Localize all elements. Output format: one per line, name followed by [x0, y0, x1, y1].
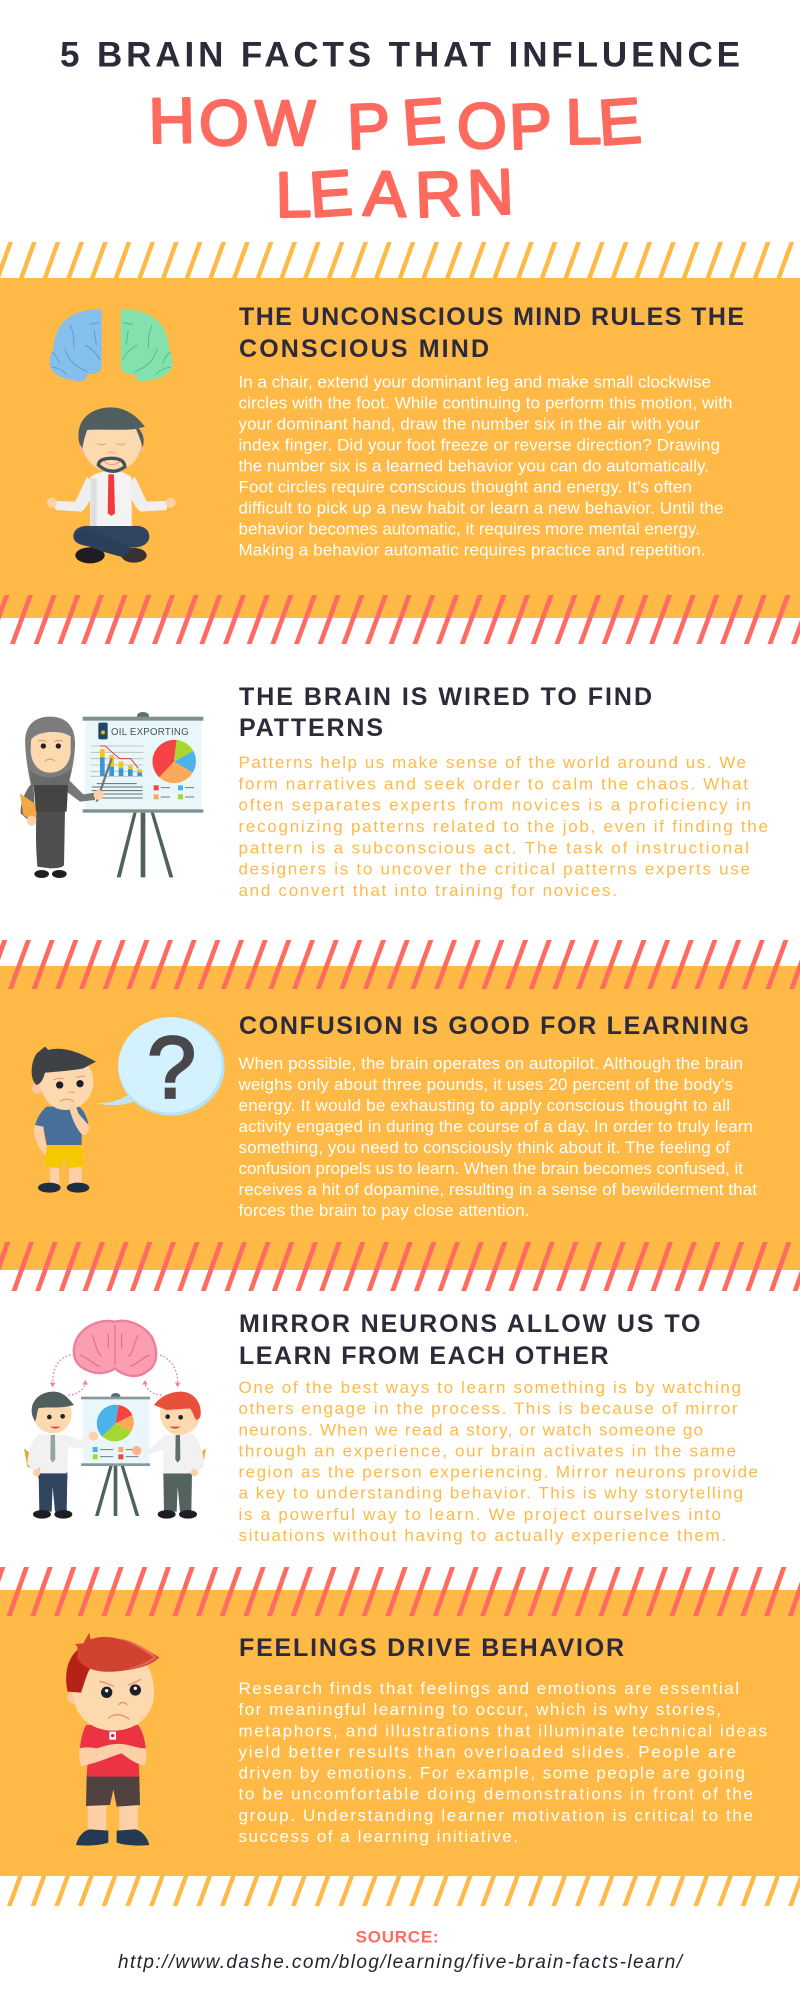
- heading: CONSCIOUS MIND: [239, 335, 489, 363]
- body text: activity engaged in during the course of a day. In order to truly learn: [238, 1117, 753, 1136]
- heading: [239, 683, 652, 742]
- body text: difficult to pick up a new habit or learn a new behavior. Until the: [238, 498, 724, 517]
- body text: [238, 1054, 757, 1220]
- icon: brain halves and meditating man: [47, 309, 176, 563]
- body text: and convert that into training for novices.: [238, 881, 617, 900]
- body text: metaphors, and illustrations that illuminate technical ideas: [238, 1721, 767, 1740]
- body text: yield better results than overloaded slides. People are: [238, 1742, 736, 1761]
- icon: two presenters and brain: [24, 1321, 206, 1519]
- right presenter: [132, 1392, 206, 1519]
- panel: unconscious mind: [0, 278, 800, 618]
- body text: One of the best ways to learn something is by watching: [238, 1378, 741, 1397]
- body text: Foot circles require conscious thought and energy. It's often: [238, 477, 692, 496]
- body text: situations without having to actually experience them.: [238, 1526, 726, 1545]
- body text: receives a hit of dopamine, resulting in a sense of bewilderment that: [238, 1180, 757, 1199]
- body text: group. Understanding learner motivation is critical to the: [238, 1806, 753, 1825]
- title line: subtitle: 5 BRAIN FACTS THAT INFLUENCE: [60, 36, 740, 74]
- body text: driven by emotions. For example, some people are going: [238, 1764, 745, 1783]
- body text: circles with the foot. While continuing to perform this motion, with: [238, 393, 732, 412]
- title line: learn: LEARN: [275, 155, 515, 231]
- body text: is a powerful way to learn. We project ourselves into: [238, 1505, 721, 1524]
- body text: pattern is a subconscious act. The task of instructional: [238, 838, 749, 857]
- title line: how people: HOW PEOPLE: [148, 84, 644, 163]
- body text: through an experience, our brain activates in the same: [238, 1441, 736, 1460]
- body text: to be uncomfortable doing demonstrations in front of the: [238, 1785, 753, 1804]
- icon: presenter with oil exporting chart: OIL EXPORTING: [111, 727, 189, 738]
- heading: [239, 303, 744, 363]
- icon: thinking boy with question bubble: [32, 1017, 225, 1193]
- body text: confusion propels us to learn. When the brain becomes confused, it: [238, 1159, 743, 1178]
- body text: weighs only about three pounds, it uses 20 percent of the body's: [238, 1075, 733, 1094]
- icon: angry boy: [66, 1633, 159, 1846]
- body text: Patterns help us make sense of the world around us. We: [238, 753, 746, 772]
- body text: designers is to uncover the critical patterns experts use: [238, 860, 750, 879]
- body text: In a chair, extend your dominant leg and make small clockwise: [238, 372, 711, 391]
- body text: something, you need to consciously think about it. The feeling of: [238, 1138, 730, 1157]
- body text: index finger. Did your foot freeze or reverse direction? Drawing: [238, 435, 720, 454]
- heading: MIRROR NEURONS ALLOW US TO: [239, 1310, 700, 1338]
- source: [118, 1928, 684, 1973]
- body text: others engage in the process. This is because of mirror: [238, 1399, 738, 1418]
- body text: your dominant hand, draw the number six in the air with your: [238, 414, 700, 433]
- source label: SOURCE:: [356, 1928, 439, 1947]
- source url: http://www.dashe.com/blog/learning/five-brain-facts-learn/: [118, 1952, 684, 1973]
- panel: mirror neurons: [24, 1310, 758, 1545]
- heading: FEELINGS DRIVE BEHAVIOR: [239, 1634, 624, 1662]
- body text: [238, 372, 732, 559]
- body text: Research finds that feelings and emotions are essential: [238, 1679, 739, 1698]
- body text: neurons. When we read a story, or watch someone go: [238, 1420, 703, 1439]
- heading: CONFUSION IS GOOD FOR LEARNING: [239, 1012, 749, 1040]
- body text: energy. It would be exhausting to apply conscious thought to all: [238, 1096, 730, 1115]
- body text: recognizing patterns related to the job, even if finding the: [238, 817, 768, 836]
- panel: feelings: [0, 1590, 800, 1876]
- panel: patterns: [20, 683, 768, 900]
- heading: LEARN FROM EACH OTHER: [239, 1342, 608, 1370]
- body text: a key to understanding behavior. This is why storytelling: [238, 1484, 743, 1503]
- icon: thinking boy with question bubble: ?: [147, 1018, 196, 1116]
- body text: [238, 753, 768, 900]
- body text: for meaningful learning to occur, which is why stories,: [238, 1700, 721, 1719]
- body text: success of a learning initiative.: [238, 1827, 518, 1846]
- heading: THE BRAIN IS WIRED TO FIND: [239, 683, 652, 711]
- left presenter: [24, 1392, 98, 1519]
- body text: region as the person experiencing. Mirror neurons provide: [238, 1463, 758, 1482]
- panel: confusion: [0, 966, 800, 1270]
- heading: THE UNCONSCIOUS MIND RULES THE: [239, 303, 744, 331]
- body text: often separates experts from novices is a proficiency in: [238, 796, 751, 815]
- body text: Making a behavior automatic requires practice and repetition.: [238, 540, 706, 559]
- body text: behavior becomes automatic, it requires more mental energy.: [238, 519, 700, 538]
- heading: PATTERNS: [239, 714, 383, 742]
- body text: [238, 1679, 767, 1846]
- title: [60, 36, 740, 231]
- body text: forces the brain to pay close attention.: [238, 1201, 530, 1220]
- icon: presenter with oil exporting chart: [20, 712, 203, 878]
- body text: form narratives and seek order to calm the chaos. What: [238, 774, 748, 793]
- body text: the number six is a learned behavior you can do automatically.: [238, 456, 709, 475]
- heading: [239, 1310, 700, 1370]
- body text: [238, 1378, 758, 1545]
- body text: When possible, the brain operates on autopilot. Although the brain: [238, 1054, 743, 1073]
